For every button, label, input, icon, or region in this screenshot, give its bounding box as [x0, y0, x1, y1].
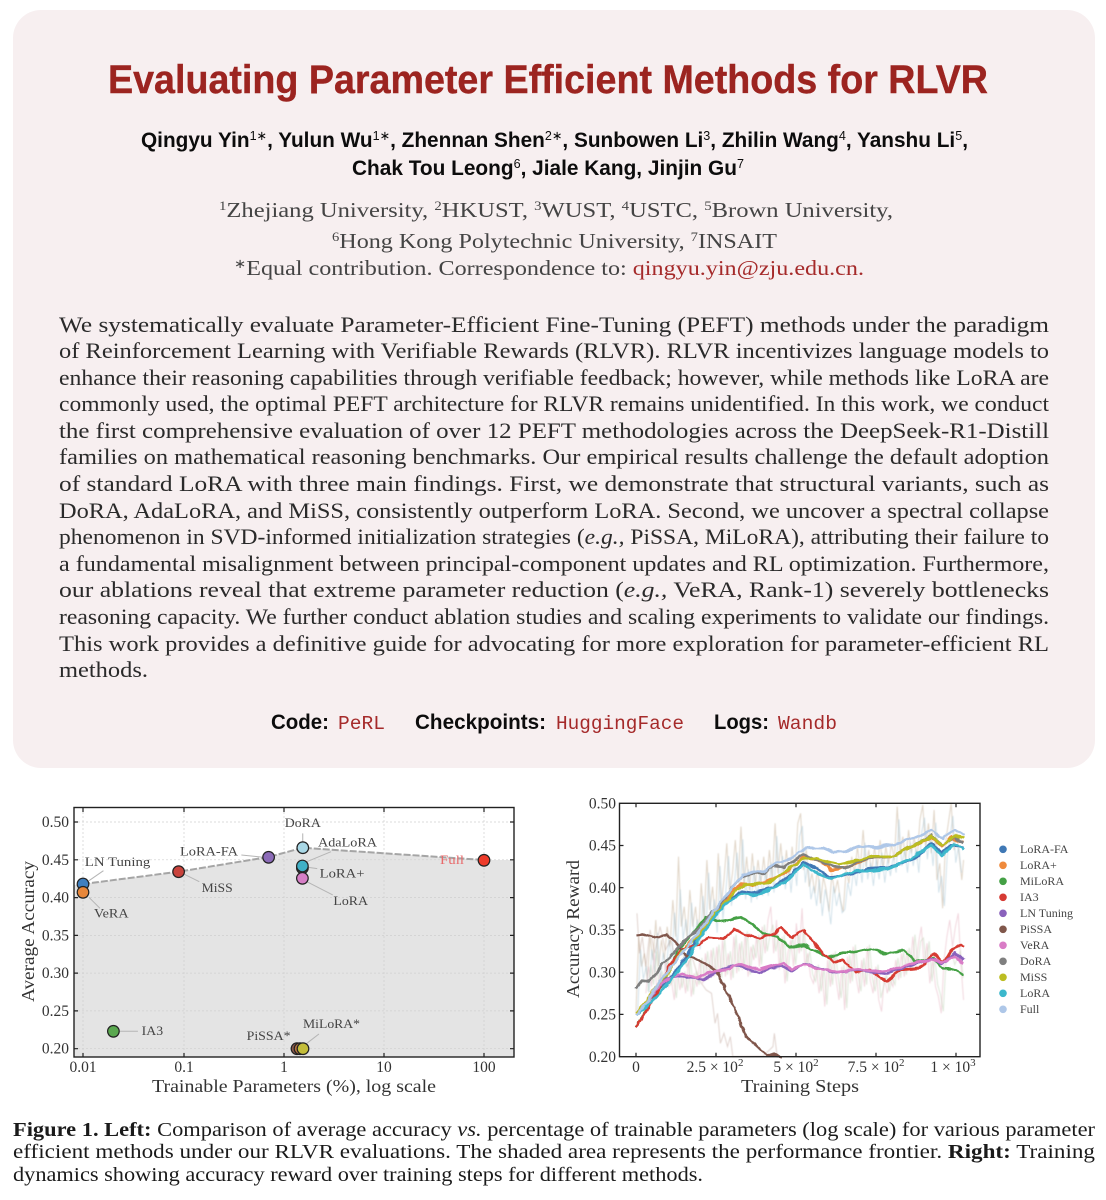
axis tick labels	[589, 796, 976, 1076]
abstract text: methods.	[59, 657, 148, 682]
curve: PiSSA	[636, 934, 783, 1056]
axis tick labels: 0.50	[589, 796, 616, 812]
legend: LN Tuning	[1020, 906, 1073, 920]
affiliations: WUST,	[542, 198, 622, 222]
affiliations: INSAIT	[698, 229, 777, 253]
affiliations: HKUST,	[442, 198, 534, 222]
chart: accuracy reward over training steps	[563, 796, 1073, 1096]
abstract text: enhance their reasoning capabilities through verifiable feedback; however, while methods like LoRA are	[59, 365, 1049, 390]
point: VeRA	[77, 886, 89, 898]
point labels: AdaLoRA	[318, 835, 378, 850]
legend: PiSSA	[1020, 922, 1052, 936]
resource links: Checkpoints:	[415, 710, 546, 734]
affiliations: Brown University,	[712, 198, 893, 222]
training curves	[636, 830, 964, 1056]
resource links: Code:	[271, 710, 329, 734]
authors: 1∗	[373, 128, 390, 143]
figure caption: dynamics showing accuracy reward over training steps for different methods.	[13, 1164, 703, 1186]
abstract text: families on mathematical reasoning benchmarks. Our empirical results challenge the default adoption	[59, 444, 1049, 469]
resource links: Wandb	[778, 713, 837, 735]
authors: 3	[703, 128, 710, 143]
legend: LoRA	[1020, 986, 1050, 1000]
axis tick labels: 3	[970, 1057, 976, 1069]
affiliations: 7	[691, 229, 699, 244]
curve: LN Tuning	[646, 953, 964, 1004]
abstract text: We systematically evaluate Parameter-Efficient Fine-Tuning (PEFT) methods under the paradigm	[59, 312, 1049, 337]
axis tick labels: 0.45	[589, 838, 616, 855]
point: DoRA	[297, 842, 309, 854]
legend: LoRA-FA	[1020, 842, 1069, 856]
point labels: LoRA-FA	[180, 844, 239, 859]
resource links: PeRL	[338, 713, 385, 735]
axis tick labels: 7.5 × 10	[848, 1059, 899, 1076]
x axis title: Trainable Parameters (%), log scale	[152, 1076, 436, 1096]
frontier dashed line	[83, 848, 484, 884]
point: MiSS	[173, 866, 184, 878]
authors: 4	[839, 128, 846, 143]
point: IA3	[108, 1026, 119, 1037]
affiliations	[219, 198, 893, 280]
authors: , Yulun Wu	[267, 128, 373, 152]
axis tick labels: 2	[899, 1057, 904, 1069]
affiliations: 4	[622, 198, 630, 213]
legend: VeRA	[1020, 938, 1050, 952]
axis tick labels: 0.01	[69, 1059, 97, 1076]
axes frame and ticks	[620, 803, 980, 1057]
y axis title: Accuracy Reward	[563, 860, 583, 998]
authors: ,	[962, 128, 968, 152]
leader lines	[89, 833, 333, 1043]
axes frame and ticks	[74, 808, 514, 1057]
affiliations: 3	[534, 198, 542, 213]
point: AdaLoRA	[297, 860, 308, 872]
abstract text: our ablations reveal that extreme parameter reduction ( e.g., VeRA, Rank-1) severely bottlenecks	[59, 577, 1049, 602]
figure caption: efficient methods under our RLVR evaluations. The shaded area represents the performance frontier. Right: Training	[13, 1141, 1095, 1163]
affiliations: 2	[434, 198, 442, 213]
authors	[141, 128, 968, 180]
abstract text: a fundamental misalignment between principal-component updates and RL optimization. Furthermore,	[59, 551, 1049, 576]
authors: , Sunbowen Li	[562, 128, 703, 152]
point labels: LN Tuning	[85, 854, 151, 869]
axis tick labels: 1	[280, 1059, 288, 1076]
authors: , Zhennan Shen	[390, 128, 545, 152]
point labels: LoRA+	[320, 866, 364, 881]
authors: Chak Tou Leong	[352, 156, 519, 180]
curve: MiLoRA	[636, 917, 964, 1027]
abstract text: This work provides a definitive guide for advocating for more exploration for parameter-efficient RL	[59, 631, 1049, 656]
point labels: DoRA	[285, 815, 321, 830]
resource links: HuggingFace	[556, 713, 684, 735]
point: LoRA-FA	[263, 852, 274, 863]
abstract text: phenomenon in SVD-informed initialization strategies ( e.g., PiSSA, MiLoRA), attributing their failure to	[59, 524, 1049, 549]
axis tick labels: 0.40	[42, 890, 69, 907]
legend: LoRA+	[1020, 858, 1057, 872]
abstract text: DoRA, AdaLoRA, and MiSS, consistently outperform LoRA. Second, we uncover a spectral collapse	[59, 498, 1049, 523]
authors: 7	[737, 156, 744, 171]
figure caption: Figure 1. Left: Comparison of average accuracy vs. percentage of trainable parameters (log scale) for various parameter	[13, 1119, 1095, 1141]
legend: DoRA	[1020, 954, 1052, 968]
axis tick labels: 0.50	[42, 814, 69, 831]
axis tick labels: 0.30	[589, 964, 616, 981]
y axis title: Average Accuracy	[18, 861, 38, 1002]
point: PiSSA overlay	[294, 1043, 306, 1054]
axis tick labels: 0.30	[42, 965, 69, 982]
axis tick labels: 1 × 10	[930, 1059, 970, 1076]
axis tick labels: 0.35	[589, 922, 616, 939]
axis tick labels: 0.35	[42, 927, 69, 944]
curve: Full	[636, 830, 964, 1015]
legend: IA3	[1020, 890, 1039, 904]
abstract text	[59, 312, 1049, 682]
point: MiLoRA	[297, 1043, 309, 1054]
resource links	[271, 710, 837, 735]
noisy raw traces	[636, 803, 964, 1057]
affiliations: Equal contribution. Correspondence to:	[246, 256, 633, 280]
curve: LoRA+	[636, 837, 964, 1013]
data points	[77, 842, 490, 1054]
curve: LoRA-FA	[636, 843, 964, 1013]
axis tick labels: 0.1	[174, 1059, 194, 1076]
axis tick labels: 0.25	[42, 1003, 69, 1020]
axis tick labels: 0.20	[42, 1041, 69, 1058]
point: Full	[478, 854, 490, 866]
axis tick labels	[42, 814, 496, 1076]
title: Evaluating Parameter Efficient Methods for RLVR	[108, 58, 988, 102]
abstract text: of standard LoRA with three main findings. First, we demonstrate that structural variants, such as	[59, 471, 1049, 496]
axis tick labels: 2	[738, 1057, 743, 1069]
point: LN Tuning	[77, 878, 89, 890]
axis tick labels: 0	[632, 1059, 640, 1076]
axis tick labels: 2.5 × 10	[687, 1059, 738, 1076]
point labels: Full	[440, 852, 464, 867]
chart: accuracy vs trainable parameters scatter	[18, 808, 514, 1096]
curve: IA3	[636, 927, 964, 1027]
axis tick labels: 0.45	[42, 852, 69, 869]
point labels: LoRA	[333, 893, 369, 908]
curve: VeRA	[636, 957, 964, 1015]
axis tick labels: 5 × 10	[773, 1059, 813, 1076]
abstract text: of Reinforcement Learning with Verifiable Rewards (RLVR). RLVR incentivizes language models to	[59, 338, 1049, 363]
authors: 2∗	[545, 128, 562, 143]
abstract text: the first comprehensive evaluation of over 12 PEFT methodologies across the DeepSeek-R1-Distill	[59, 418, 1049, 443]
resource links: Logs:	[714, 710, 769, 734]
authors: 1∗	[250, 128, 267, 143]
affiliations: 6	[332, 229, 340, 244]
point: LoRA	[297, 872, 308, 884]
point labels: MiLoRA*	[303, 1016, 360, 1031]
affiliations: qingyu.yin@zju.edu.cn.	[633, 256, 864, 280]
curve: LoRA	[636, 844, 964, 1015]
abstract text: reasoning capacity. We further conduct ablation studies and scaling experiments to validate our findings.	[59, 604, 1049, 629]
authors: , Jiale Kang, Jinjin Gu	[521, 156, 737, 180]
authors: Qingyu Yin	[141, 128, 253, 152]
authors: 5	[955, 128, 962, 143]
legend: MiLoRA	[1020, 874, 1064, 888]
authors: , Yanshu Li	[846, 128, 955, 152]
point: PiSSA	[291, 1043, 303, 1054]
figure caption	[13, 1119, 1095, 1186]
affiliations: 5	[704, 198, 712, 213]
axis tick labels: 0.20	[589, 1049, 616, 1066]
axis tick labels: 10	[376, 1059, 392, 1076]
legend: Full	[1020, 1002, 1040, 1016]
axis tick labels: 0.40	[589, 880, 616, 897]
authors: 6	[514, 156, 521, 171]
shaded performance frontier	[74, 848, 514, 1057]
affiliations: ∗	[234, 256, 246, 271]
affiliations: 1	[219, 198, 226, 213]
point labels: MiSS	[202, 880, 233, 895]
axis tick labels: 2	[813, 1057, 819, 1069]
authors: , Zhilin Wang	[710, 128, 839, 152]
legend	[999, 842, 1073, 1016]
point: LoRA+	[297, 862, 308, 874]
affiliations: Zhejiang University,	[226, 198, 434, 222]
panel: paper header	[13, 10, 1095, 768]
curve: MiSS	[636, 836, 964, 1013]
point labels	[85, 815, 464, 1043]
affiliations: Hong Kong Polytechnic University,	[339, 229, 691, 253]
x axis title: Training Steps	[741, 1076, 859, 1096]
affiliations: USTC,	[629, 198, 704, 222]
axis tick labels: 0.25	[589, 1007, 616, 1024]
axis tick labels: 100	[472, 1059, 496, 1076]
point labels: IA3	[142, 1023, 163, 1038]
curve: DoRA	[636, 836, 964, 988]
point labels: PiSSA*	[247, 1028, 291, 1043]
abstract text: commonly used, the optimal PEFT architecture for RLVR remains unidentified. In this work, we conduct	[59, 391, 1049, 416]
legend: MiSS	[1020, 970, 1047, 984]
point labels: VeRA	[94, 906, 129, 921]
